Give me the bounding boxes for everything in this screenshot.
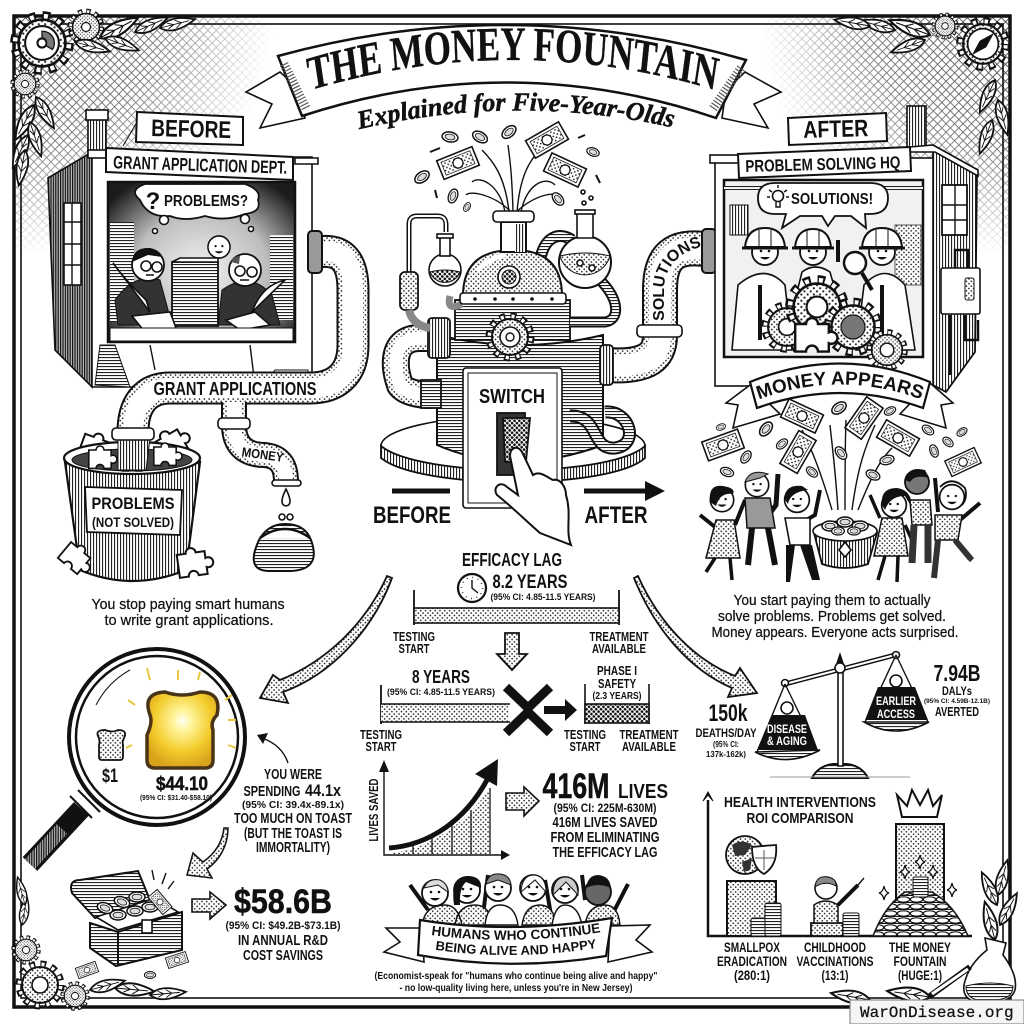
efficacy lag header — [458, 550, 596, 603]
chart: lives saved curve: LIVES SAVED — [367, 778, 381, 842]
timeline bar: phase I safety: AVAILABLE — [622, 739, 676, 754]
before arrow and label — [373, 491, 451, 529]
panel: after building — [710, 106, 980, 392]
weight: disease and aging: DISEASE — [767, 722, 807, 736]
scholar figures — [113, 236, 285, 325]
timeline bar: current efficacy lag: AVAILABLE — [592, 641, 646, 656]
stat: DALYs averted: AVERTED — [935, 704, 979, 719]
timeline bar: phase I safety — [564, 663, 679, 754]
bar labels: VACCINATIONS — [796, 954, 874, 969]
bar labels: (280:1) — [734, 968, 770, 983]
bar: childhood vaccinations — [811, 877, 864, 936]
arrow: to lives saved — [506, 787, 539, 816]
timeline bar: phase I safety: START — [570, 739, 601, 754]
treasure bowl — [813, 517, 877, 568]
money fountain with crowd — [700, 397, 981, 582]
center machine — [380, 120, 714, 481]
chart title: ROI COMPARISON — [746, 810, 854, 827]
pipe label: solutions: SOLUTIONS — [653, 237, 700, 320]
stat: DALYs averted — [924, 660, 990, 719]
bar: smallpox eradication — [726, 836, 781, 936]
arrow: right — [544, 699, 577, 721]
timeline bar: crossed out — [360, 667, 510, 754]
icon: pointing hand — [495, 448, 571, 545]
efficacy lag header: EFFICACY LAG — [462, 550, 562, 570]
timeline bar: crossed out: TESTING — [360, 727, 402, 742]
arrow: down — [497, 633, 527, 670]
stat: deaths per day: (95% CI: — [713, 740, 739, 749]
engineer figures — [732, 228, 915, 350]
magnifier handle — [30, 790, 100, 864]
sign: problem solving hq: PROBLEM SOLVING HQ — [745, 153, 901, 176]
thought cloud: problems: ? — [146, 188, 160, 215]
switch plate — [463, 368, 562, 508]
panel: before building — [48, 110, 353, 432]
title banner — [244, 24, 783, 130]
icon: globe and shield — [726, 836, 776, 874]
timeline bar: crossed out: 8 YEARS — [412, 667, 470, 687]
bar: the money fountain — [873, 790, 968, 936]
icon: problems bucket — [58, 421, 215, 581]
chart title: HEALTH INTERVENTIONS — [724, 794, 876, 811]
timeline bar: phase I safety: TREATMENT — [620, 727, 679, 742]
subtitle text: Explained for Five-Year-Olds — [358, 92, 675, 130]
bar labels: FOUNTAIN — [894, 954, 946, 969]
switch label: SWITCH — [479, 386, 545, 408]
arrow: curved down to chest — [187, 828, 228, 878]
gears and puzzle — [766, 281, 904, 367]
machine base — [381, 416, 645, 482]
dome — [463, 250, 562, 296]
person 1 — [700, 486, 745, 580]
coil pipe — [570, 412, 629, 448]
footnote: (Economist-speak for "humans who continue being alive and happy" — [374, 970, 658, 982]
text: you were spending: TOO MUCH ON TOAST — [234, 811, 352, 827]
stat: annual savings: COST SAVINGS — [243, 948, 323, 964]
stat: DALYs averted: DALYs — [942, 684, 972, 698]
bar labels — [717, 940, 951, 983]
banner: humans who continue — [382, 916, 654, 965]
timeline bar: crossed out: START — [366, 739, 397, 754]
stat: 416M lives: 416M LIVES SAVED — [552, 814, 658, 831]
icon: crown — [897, 790, 942, 817]
right flask and tube — [540, 190, 616, 322]
sign: grant application dept — [106, 148, 293, 180]
bucket label — [85, 487, 182, 535]
gear — [490, 317, 530, 357]
bucket label: (NOT SOLVED) — [92, 514, 174, 530]
pipe: money branch — [218, 402, 301, 506]
arrow: block right to savings — [192, 892, 226, 919]
stat: annual savings: (95% CI: $49.2B-$73.1B) — [226, 920, 341, 932]
timeline bar: current efficacy lag: START — [398, 641, 430, 656]
text: you stop paying: You stop paying smart humans — [92, 596, 284, 613]
stat: annual savings: IN ANNUAL R&D — [238, 933, 328, 949]
arrow: curved left to toast — [260, 576, 392, 703]
bar labels: CHILDHOOD — [804, 940, 866, 955]
crowd: humans — [410, 874, 628, 925]
magnifying glass with toast — [30, 649, 245, 864]
money label: MONEY — [241, 444, 285, 465]
gauge — [498, 266, 520, 288]
text: you stop paying — [92, 596, 284, 629]
magnifying glass with toast: (95% CI: $31.40-$58.10) — [140, 795, 212, 802]
person 3 — [784, 486, 820, 582]
footnote: - no low-quality living here, unless you're in New Jersey) — [400, 982, 632, 994]
timeline bar: phase I safety: (2.3 YEARS) — [592, 691, 642, 702]
stat: 416M lives: LIVES — [618, 781, 668, 803]
stat: deaths per day: DEATHS/DAY — [696, 726, 756, 740]
magnifying glass with toast: $44.10 — [156, 774, 208, 795]
after arrow and label — [584, 481, 665, 529]
text: you were spending: YOU WERE — [264, 767, 322, 783]
person 6 — [934, 478, 980, 578]
icon: light bulb — [767, 185, 789, 207]
weight: disease and aging: & AGING — [767, 734, 807, 748]
weight: earlier access: ACCESS — [877, 707, 915, 721]
timeline bar: current efficacy lag — [393, 590, 649, 656]
footnote — [374, 970, 658, 994]
stat: DALYs averted: (95% CI: 4.59B-12.1B) — [924, 698, 990, 705]
water stream into bucket — [118, 438, 150, 470]
bar labels: (13:1) — [822, 968, 848, 983]
bar labels: THE MONEY — [889, 940, 951, 955]
window scene: scholars writing grants — [108, 182, 295, 342]
person 4 — [870, 488, 912, 582]
after arrow and label: AFTER — [584, 502, 648, 529]
chart: health interventions ROI comparison — [703, 790, 972, 983]
banner: humans who continue: BEING ALIVE AND HAPPY — [436, 939, 596, 955]
text: you were spending — [234, 767, 352, 856]
stat: deaths per day — [696, 700, 756, 759]
timeline bar: phase I safety: PHASE I — [597, 663, 637, 678]
timeline bar: phase I safety: SAFETY — [598, 676, 636, 691]
corner ornament: top-left gears and leaves — [8, 12, 196, 186]
text: you start paying: Money appears. Everyone acts surprised. — [712, 624, 958, 641]
icon: clock — [458, 574, 486, 602]
footer badge — [850, 1000, 1024, 1024]
sign: before — [123, 112, 243, 146]
icon: treasure chest — [71, 870, 189, 979]
text: you were spending: 44.1x — [305, 781, 341, 800]
corner ornament: top-right compass and leaves — [834, 14, 1013, 156]
text: you were spending: (95% CI: 39.4x-89.1x) — [242, 799, 344, 811]
weight: disease and aging — [755, 684, 820, 760]
neck — [493, 211, 534, 252]
text: you were spending: IMMORTALITY) — [256, 840, 330, 856]
icon: cross — [506, 687, 550, 733]
timeline bar: phase I safety: TESTING — [564, 727, 606, 742]
icon: small toast — [97, 730, 125, 760]
text: you start paying: solve problems. Problems get solved. — [718, 608, 946, 625]
text: you start paying: You start paying them to actually — [734, 592, 931, 609]
stat: annual savings: $58.6B — [234, 883, 332, 921]
timeline bar: current efficacy lag: TREATMENT — [590, 629, 649, 644]
arrow: curved right to scale — [634, 576, 757, 697]
stat: 416M lives: THE EFFICACY LAG — [552, 844, 658, 861]
stat: 416M lives: 416M — [542, 767, 610, 806]
text: you were spending: (BUT THE TOAST IS — [244, 826, 342, 842]
corner ornament: bottom-left gears and leaves — [13, 876, 186, 1008]
banner: humans who continue: HUMANS WHO CONTINUE — [432, 923, 600, 940]
weight: earlier access: EARLIER — [876, 694, 916, 708]
speech bubble: solutions — [758, 183, 888, 228]
person 2 — [745, 472, 778, 565]
magnifying glass — [838, 240, 872, 290]
pipe: grant applications — [133, 251, 353, 432]
icon: drip — [282, 489, 290, 506]
stat: 416M lives: FROM ELIMINATING — [550, 829, 660, 846]
banner: money appears — [724, 362, 955, 430]
title text: THE MONEY FOUNTAIN — [306, 28, 720, 90]
bucket label: PROBLEMS — [92, 494, 174, 513]
label: grant applications: GRANT APPLICATIONS — [154, 379, 316, 399]
sign: grant application dept: GRANT APPLICATION DEPT. — [113, 152, 287, 178]
background halftone corners — [14, 16, 1010, 256]
thought cloud: problems: PROBLEMS? — [164, 193, 248, 210]
weight: earlier access — [864, 655, 929, 731]
flying bills and coins — [702, 397, 981, 510]
speech bubble: solutions: SOLUTIONS! — [791, 191, 873, 208]
bar labels: (HUGE:1) — [898, 968, 942, 983]
text: you stop paying: to write grant applications. — [104, 612, 274, 629]
stat: deaths per day: 137k-162k) — [706, 750, 746, 759]
stat: deaths per day: 150k — [708, 700, 748, 727]
balance scale — [755, 652, 929, 778]
icon: golden toast — [126, 668, 236, 768]
text: you start paying — [712, 592, 958, 641]
before arrow and label: BEFORE — [373, 502, 451, 529]
chart title — [724, 794, 876, 827]
thought cloud: problems — [135, 184, 259, 234]
corner ornament: bottom-right flask and leaves — [830, 859, 1022, 1006]
toggle — [497, 413, 530, 475]
fountain jets and money — [413, 122, 600, 213]
bar labels: ERADICATION — [717, 954, 787, 969]
efficacy lag header: 8.2 YEARS — [492, 572, 568, 593]
paper stack — [172, 258, 218, 326]
person 5 — [905, 469, 932, 563]
machine body — [437, 335, 603, 462]
efficacy lag header: (95% CI: 4.85-11.5 YEARS) — [490, 592, 596, 603]
switch box — [941, 250, 980, 375]
footer badge: WarOnDisease.org — [860, 1004, 1014, 1022]
bar labels: SMALLPOX — [724, 940, 780, 955]
sign: after: AFTER — [803, 115, 869, 144]
stat: DALYs averted: 7.94B — [934, 660, 980, 686]
chart: lives saved curve — [367, 759, 510, 860]
window scene: engineers with gears — [724, 180, 923, 367]
text: you were spending: SPENDING — [244, 784, 300, 800]
left pipes and flask — [396, 216, 462, 408]
stat: annual savings — [226, 883, 341, 964]
stat: 416M lives: (95% CI: 225M-630M) — [554, 801, 656, 815]
timeline bar: current efficacy lag: TESTING — [393, 629, 435, 644]
sign: problem solving hq — [738, 147, 911, 178]
sign: before: BEFORE — [151, 115, 232, 144]
icon: coin purse — [254, 514, 314, 571]
icon: child with syringe — [814, 877, 864, 923]
timeline bar: crossed out: (95% CI: 4.85-11.5 YEARS) — [387, 687, 495, 698]
banner: money appears: MONEY APPEARS — [756, 372, 924, 399]
stat: 416M lives — [542, 767, 668, 861]
right pipe to solutions — [599, 228, 714, 386]
arrow: small pointer to magnifier — [257, 733, 288, 763]
magnifying glass with toast: $1 — [102, 766, 118, 787]
